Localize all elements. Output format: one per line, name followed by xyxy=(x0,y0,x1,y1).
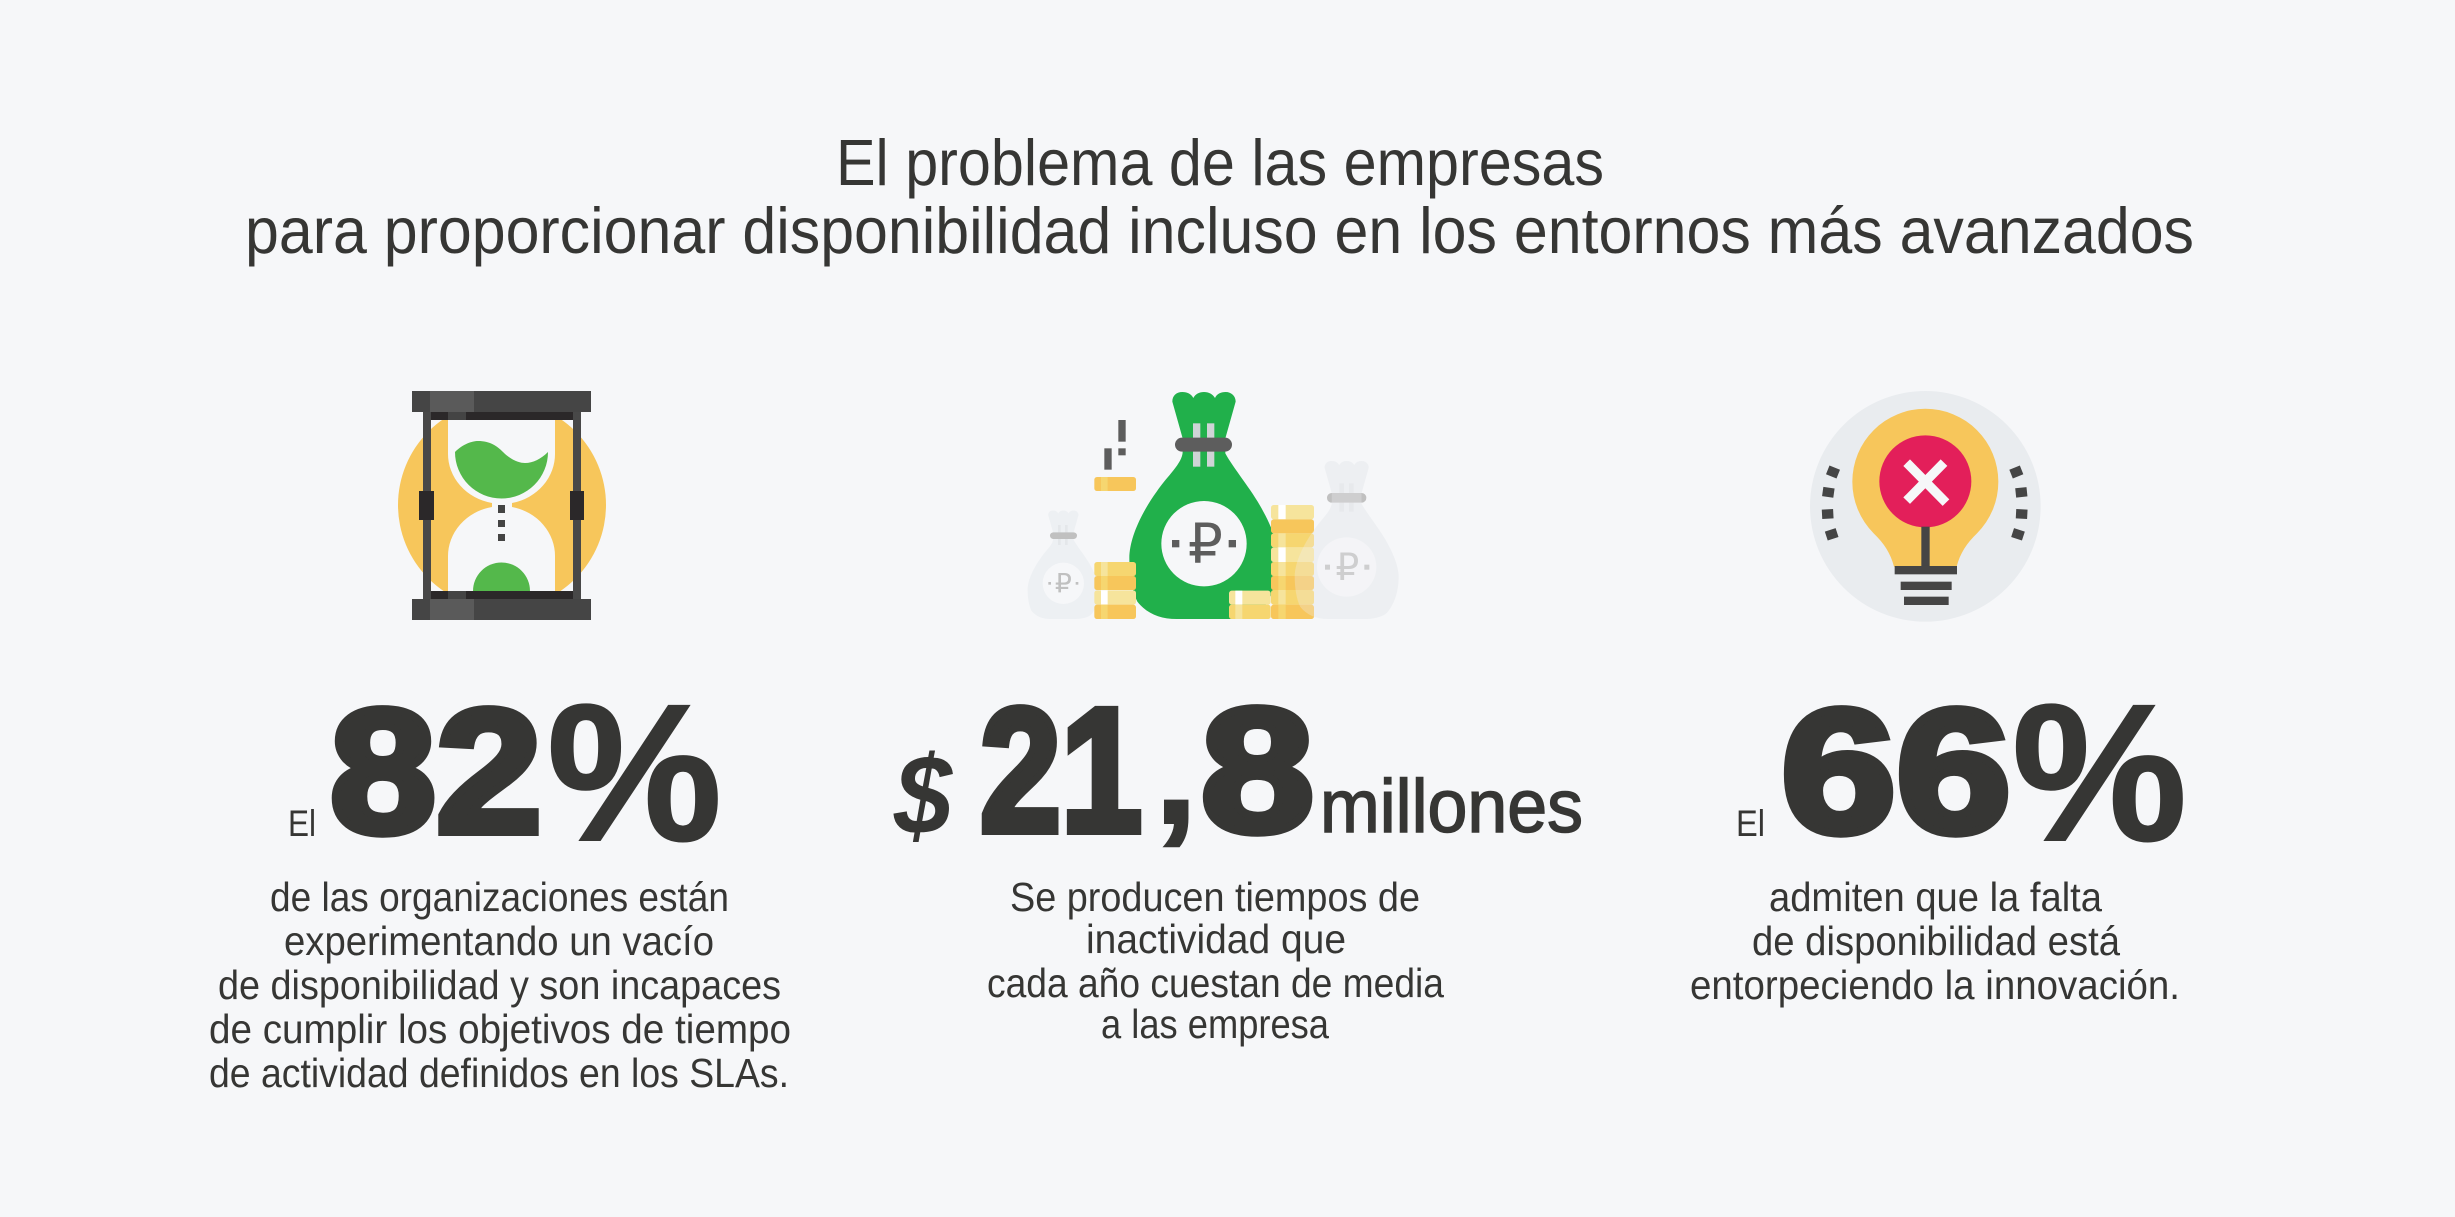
text block: 21,8 description: cada año cuestan de media xyxy=(987,960,1444,1006)
green bag xyxy=(1129,392,1279,619)
large grey bag xyxy=(1295,461,1399,619)
title line 2: para proporcionar disponibilidad incluso en los entornos más avanzados xyxy=(245,194,2194,267)
text block: 21,8 description: a las empresa xyxy=(1101,1001,1329,1047)
small grey bag: ₽ xyxy=(1055,569,1072,600)
text block: 21,8 description: Se producen tiempos de xyxy=(1010,874,1420,920)
coin: floating xyxy=(1094,477,1136,491)
stat: $ 21,8 millones xyxy=(893,673,1583,869)
text block: 21,8 description: inactividad que xyxy=(1086,916,1346,962)
stat: El 82%: El xyxy=(288,803,316,844)
panel: 82% xyxy=(209,391,791,1096)
stat: El 66%: El xyxy=(1736,803,1765,844)
text block: 66% description: admiten que la falta xyxy=(1769,874,2102,920)
large grey bag: ₽ xyxy=(1335,545,1359,589)
small grey bag xyxy=(1028,510,1099,619)
title line 1: El problema de las empresas xyxy=(836,126,1604,199)
panel: 21,8 millones xyxy=(893,392,1583,1047)
green bag: ₽ xyxy=(1188,512,1223,576)
falling marks xyxy=(1104,420,1126,470)
stat: El 82% xyxy=(288,664,722,882)
stat: $ 21,8 millones: 21 xyxy=(980,673,1142,869)
stat: $ 21,8 millones: , xyxy=(1154,687,1198,855)
text block: 66% description xyxy=(1690,874,2180,1008)
stat: El 66%: % xyxy=(2012,664,2187,882)
stat: El 82%: 82 xyxy=(330,674,542,870)
text block: 82% description: de actividad definidos en los SLAs. xyxy=(209,1050,789,1096)
coins: small stack xyxy=(1229,591,1271,619)
icon: money bags and coins xyxy=(1028,392,1399,619)
text block: 82% description xyxy=(209,874,791,1096)
text block: 82% description: de disponibilidad y son incapaces xyxy=(218,962,781,1008)
text block: 82% description: de las organizaciones están xyxy=(270,874,729,920)
coins: left stack xyxy=(1094,562,1136,619)
icon: hourglass xyxy=(398,391,606,620)
stat: El 66%: 66 xyxy=(1781,674,2011,870)
stat: $ 21,8 millones: 8 xyxy=(1201,673,1314,869)
title xyxy=(245,126,2194,267)
text block: 21,8 description xyxy=(987,874,1444,1047)
icon: light bulb with cross xyxy=(1810,391,2041,622)
coins: right stack xyxy=(1271,461,1399,619)
stat: El 66% xyxy=(1736,664,2187,882)
stat: El 82%: % xyxy=(547,664,722,882)
stat: $ 21,8 millones: millones xyxy=(1320,764,1583,848)
text block: 66% description: entorpeciendo la innovación. xyxy=(1690,962,2180,1008)
stat: $ 21,8 millones: $ xyxy=(893,733,954,858)
text block: 82% description: experimentando un vacío xyxy=(284,918,714,964)
text block: 82% description: de cumplir los objetivos de tiempo xyxy=(209,1006,791,1052)
panel: 66% xyxy=(1690,391,2187,1008)
text block: 66% description: de disponibilidad está xyxy=(1752,918,2120,964)
